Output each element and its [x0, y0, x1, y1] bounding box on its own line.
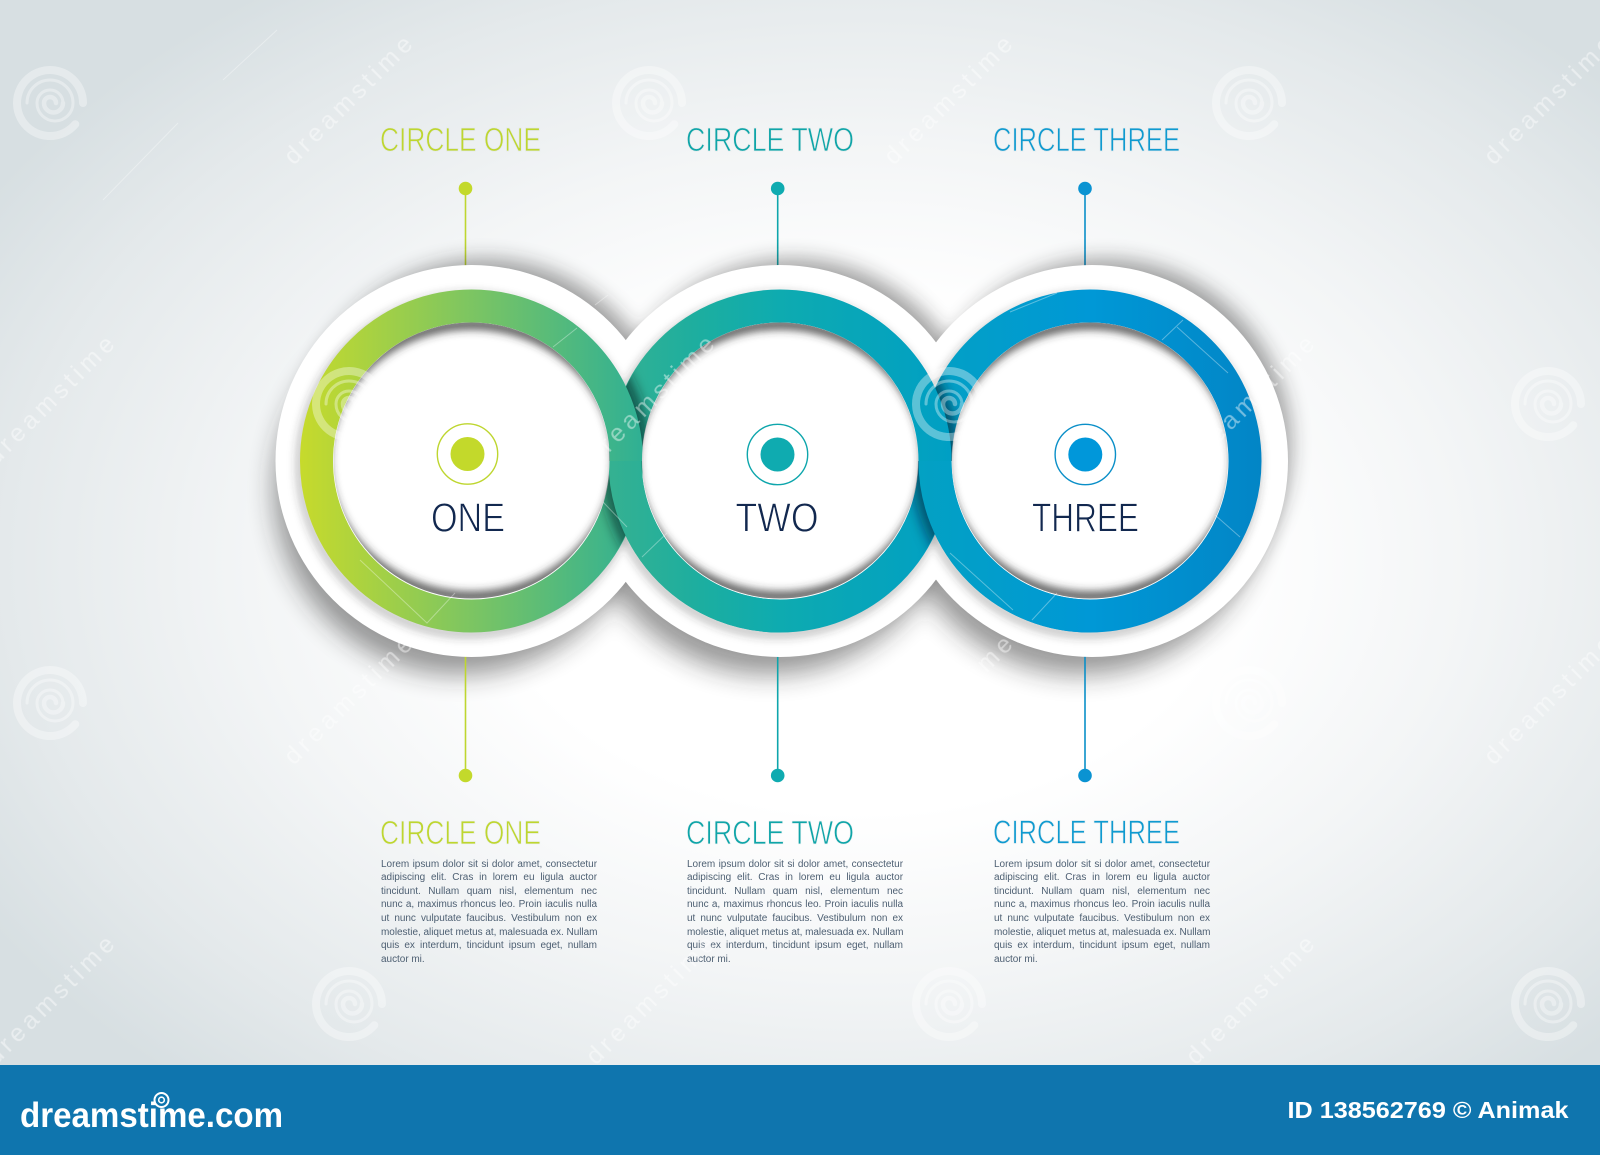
- ring three base: [935, 306, 1245, 616]
- connector: top two: [771, 182, 784, 266]
- icon: target two: [747, 424, 808, 485]
- watermark: diagonal wordmarks: dreamstime: [1180, 930, 1320, 1070]
- watermark: diagonal wordmarks: dreamstime: [278, 630, 418, 770]
- footer credit: ID 138562769 © Animak: [1288, 1097, 1569, 1123]
- text block: circle one body: quis ex interdum, tincidunt ipsum eget, nullam: [381, 940, 597, 951]
- title: circle one top: CIRCLE ONE: [380, 121, 541, 158]
- shadow of ring two on ring one: [600, 461, 642, 551]
- text block: circle one body: [381, 859, 598, 965]
- text block: circle two body: tincidunt. Nullam quam nisl, elementum nec: [687, 886, 903, 897]
- shadow of ring one on ring two: [609, 370, 652, 461]
- ring two lower left overlap: [609, 461, 780, 632]
- connector: bottom two: [771, 650, 784, 782]
- interlocked gradient rings: [314, 303, 1248, 619]
- panel: circle one centre: [326, 322, 618, 598]
- shadow of ring two on ring three: [935, 374, 960, 461]
- text block: circle three body: [994, 859, 1210, 965]
- label: one: ONE: [431, 494, 505, 540]
- text block: circle three body: Lorem ipsum dolor sit si dolor amet, consectetur: [994, 859, 1210, 870]
- watermark: diagonal wordmarks: dreamstime: [580, 330, 720, 470]
- footer logo wordmark: dreamstime.com: [20, 1096, 283, 1135]
- text block: circle two body: quis ex interdum, tincidunt ipsum eget, nullam: [687, 940, 903, 951]
- label: two: TWO: [736, 494, 818, 540]
- watermark: diagonal wordmarks: dreamstime: [878, 630, 1018, 770]
- ring contact shadows on white discs: [300, 296, 1257, 634]
- text block: circle two body: auctor mi.: [687, 954, 731, 965]
- heading: circle three lower: CIRCLE THREE: [993, 814, 1180, 850]
- text block: circle three body: ut nunc vulputate faucibus. Vestibulum non ex: [994, 913, 1210, 924]
- icon: target three: [1055, 424, 1116, 485]
- panel: circle two centre: [634, 322, 926, 598]
- title: circle two top: CIRCLE TWO: [686, 121, 854, 158]
- watermark: diagonal wordmarks: dreamstime: [278, 30, 418, 170]
- text block: circle two body: Lorem ipsum dolor sit si dolor amet, consectetur: [687, 859, 903, 870]
- cast shadows behind discs: [274, 259, 1291, 675]
- connector: top one: [459, 182, 472, 266]
- text block: circle one body: nunc a, maximus rhoncus leo. Proin iaculis nulla: [381, 899, 597, 910]
- text block: circle two body: nunc a, maximus rhoncus leo. Proin iaculis nulla: [687, 899, 903, 910]
- ring one base: [316, 306, 626, 616]
- icon: target one: [437, 424, 498, 484]
- text block: circle three body: adipiscing elit. Cras in lorem eu ligula auctor: [994, 872, 1210, 883]
- text block: circle three body: tincidunt. Nullam quam nisl, elementum nec: [994, 886, 1210, 897]
- label: three: THREE: [1032, 494, 1139, 540]
- heading: circle one lower: CIRCLE ONE: [380, 814, 541, 851]
- connector: bottom one: [459, 650, 472, 782]
- text block: circle three body: nunc a, maximus rhoncus leo. Proin iaculis nulla: [994, 899, 1210, 910]
- text block: circle three body: auctor mi.: [994, 954, 1038, 965]
- text block: circle two body: ut nunc vulputate faucibus. Vestibulum non ex: [687, 913, 903, 924]
- text block: circle three body: molestie, aliquet metus at, malesuada ex. Nullam: [994, 927, 1210, 938]
- text block: circle one body: tincidunt. Nullam quam nisl, elementum nec: [381, 886, 597, 897]
- text block: circle three body: quis ex interdum, tincidunt ipsum eget, nullam: [994, 940, 1210, 951]
- text block: circle one body: auctor mi.: [381, 954, 425, 965]
- shadow of ring three on ring two: [909, 461, 935, 550]
- white backing discs: [276, 265, 1288, 657]
- ring two base: [625, 306, 935, 616]
- text block: circle two body: [687, 859, 904, 965]
- watermark: diagonal wordmarks: dreamstime: [580, 930, 720, 1070]
- title: circle three top: CIRCLE THREE: [993, 121, 1180, 158]
- watermark: diagonal wordmarks: dreamstime: [878, 30, 1018, 170]
- ring three lower left overlap: [918, 461, 1089, 632]
- text block: circle one body: ut nunc vulputate faucibus. Vestibulum non ex: [381, 913, 597, 924]
- footer banner: [0, 1065, 1600, 1155]
- watermark: diagonal wordmarks: dreamstime: [1180, 330, 1320, 470]
- connector: top three: [1078, 182, 1092, 266]
- panel: circle three centre: [944, 322, 1236, 598]
- icon: footer spiral: [154, 1093, 168, 1107]
- text block: circle two body: adipiscing elit. Cras in lorem eu ligula auctor: [687, 872, 903, 883]
- text block: circle one body: adipiscing elit. Cras in lorem eu ligula auctor: [381, 872, 597, 883]
- connector: bottom three: [1078, 650, 1092, 782]
- text block: circle one body: molestie, aliquet metus at, malesuada ex. Nullam: [381, 927, 597, 938]
- text block: circle two body: molestie, aliquet metus at, malesuada ex. Nullam: [687, 927, 903, 938]
- heading: circle two lower: CIRCLE TWO: [686, 814, 854, 851]
- text block: circle one body: Lorem ipsum dolor sit si dolor amet, consectetur: [381, 859, 597, 870]
